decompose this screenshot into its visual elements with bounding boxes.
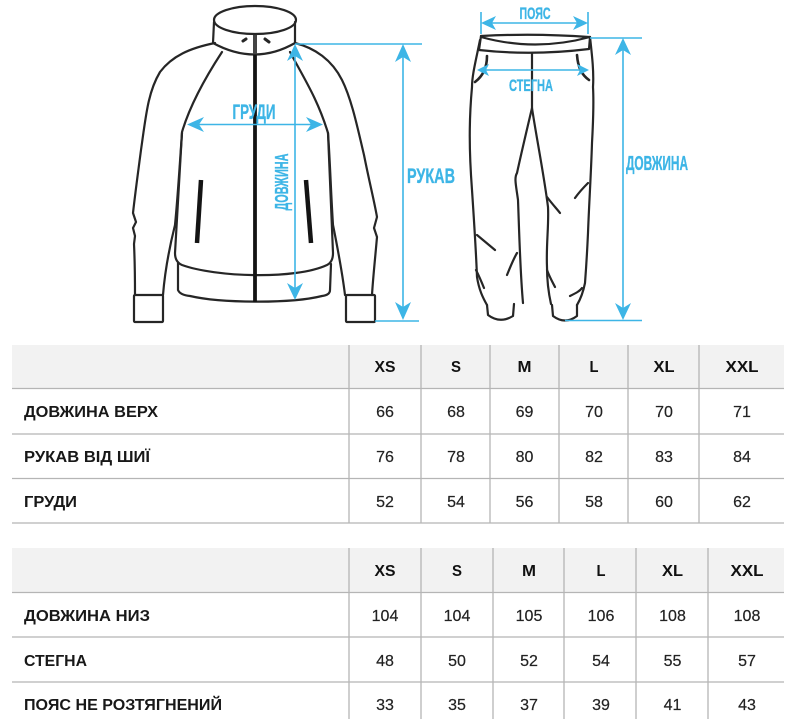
row: top length: 71 [733,404,751,421]
top table size headers [374,359,759,376]
waist label: ПОЯС [520,4,550,23]
row: chest: 60 [655,494,673,511]
row: sleeve from neck: РУКАВ ВІД ШИЇ [24,448,151,466]
trousers left leg [470,40,532,305]
bottom table size headers [374,563,764,580]
row: top length: ДОВЖИНА ВЕРХ [24,404,158,421]
row: top length: 69 [516,404,534,421]
jacket diagram [133,6,377,322]
row: hips [24,653,756,670]
top table size headers: XXL [726,359,759,376]
row: bottom length: 104 [444,608,470,625]
row: waist unstretched: 33 [376,697,394,714]
row: top length: 66 [376,404,394,421]
row: chest: 54 [447,494,465,511]
row: top length: 70 [655,404,673,421]
row: waist unstretched: ПОЯС НЕ РОЗТЯГНЕНИЙ [24,695,222,714]
trousers waistband [479,35,590,53]
trousers length arrow [565,38,642,320]
trousers right outer seam [577,37,593,305]
row: bottom length: 106 [588,608,614,625]
bottom size table [12,548,784,719]
jacket right sleeve [295,43,377,322]
trousers pockets [475,55,589,82]
chest measurement arrow [187,117,323,132]
row: chest: 52 [376,494,394,511]
row: waist unstretched: 35 [448,697,466,714]
jacket zipper [253,35,257,302]
hip label: СТЕГНА [509,76,553,95]
bottom table grid [12,548,784,719]
bottom table size headers: S [452,563,462,580]
row: top length: 68 [447,404,465,421]
top table size headers: L [590,359,599,376]
row: sleeve from neck [24,448,751,466]
top table size headers: XS [374,359,396,376]
row: waist unstretched: 37 [520,697,538,714]
trousers wrinkles [476,183,588,296]
hip measurement arrow [477,64,589,76]
trousers length label: ДОВЖИНА [626,153,688,175]
row: hips: 57 [738,653,756,670]
trousers right cuff [552,305,577,320]
top table header background [12,345,784,388]
trousers left cuff [487,304,514,320]
bottom table size headers: XL [662,563,683,580]
bottom table size headers: XXL [730,563,764,580]
row: bottom length: 105 [516,608,542,625]
row: waist unstretched: 39 [592,697,610,714]
row: sleeve from neck: 76 [376,449,394,466]
row: chest [24,494,751,511]
row: bottom length: 108 [659,608,686,625]
jacket left sleeve [133,43,215,322]
sleeve label: РУКАВ [407,165,455,188]
row: sleeve from neck: 78 [447,449,465,466]
bottom table size headers: XS [374,563,396,580]
row: sleeve from neck: 82 [585,449,603,466]
row: sleeve from neck: 84 [733,449,751,466]
row: waist unstretched [24,695,756,714]
row: top length [24,404,751,421]
row: hips: 48 [376,653,394,670]
row: bottom length: 108 [734,608,760,625]
row: chest: ГРУДИ [24,494,77,511]
bottom table header background [12,548,784,592]
waist measurement arrow [481,12,588,34]
row: bottom length [24,608,760,625]
row: waist unstretched: 43 [738,697,756,714]
row: waist unstretched: 41 [664,697,682,714]
jacket body [175,52,333,302]
jacket left pocket [197,180,201,243]
row: hips: СТЕГНА [24,653,87,670]
row: hips: 52 [520,653,538,670]
trousers diagram [470,35,593,320]
row: chest: 56 [516,494,534,511]
jacket collar [213,6,296,54]
jacket length arrow [287,44,303,300]
top table size headers: S [451,359,461,376]
row: chest: 58 [585,494,603,511]
jacket right pocket [306,180,311,243]
row: hips: 54 [592,653,610,670]
row: sleeve from neck: 83 [655,449,673,466]
bottom table size headers: M [522,563,536,580]
row: hips: 50 [448,653,466,670]
row: sleeve from neck: 80 [516,449,534,466]
row: bottom length: ДОВЖИНА НИЗ [24,608,150,625]
row: hips: 55 [664,653,682,670]
top size table [12,345,784,523]
top table size headers: XL [654,359,675,376]
bottom table size headers: L [596,563,606,580]
row: top length: 70 [585,404,603,421]
chest label: ГРУДИ [232,101,276,124]
trousers centre seam and right leg [532,53,551,304]
row: chest: 62 [733,494,751,511]
top table grid [12,345,784,523]
top table size headers: M [518,359,532,376]
row: bottom length: 104 [372,608,398,625]
sleeve measurement arrow [295,44,422,321]
jacket length label: ДОВЖИНА [272,154,292,210]
